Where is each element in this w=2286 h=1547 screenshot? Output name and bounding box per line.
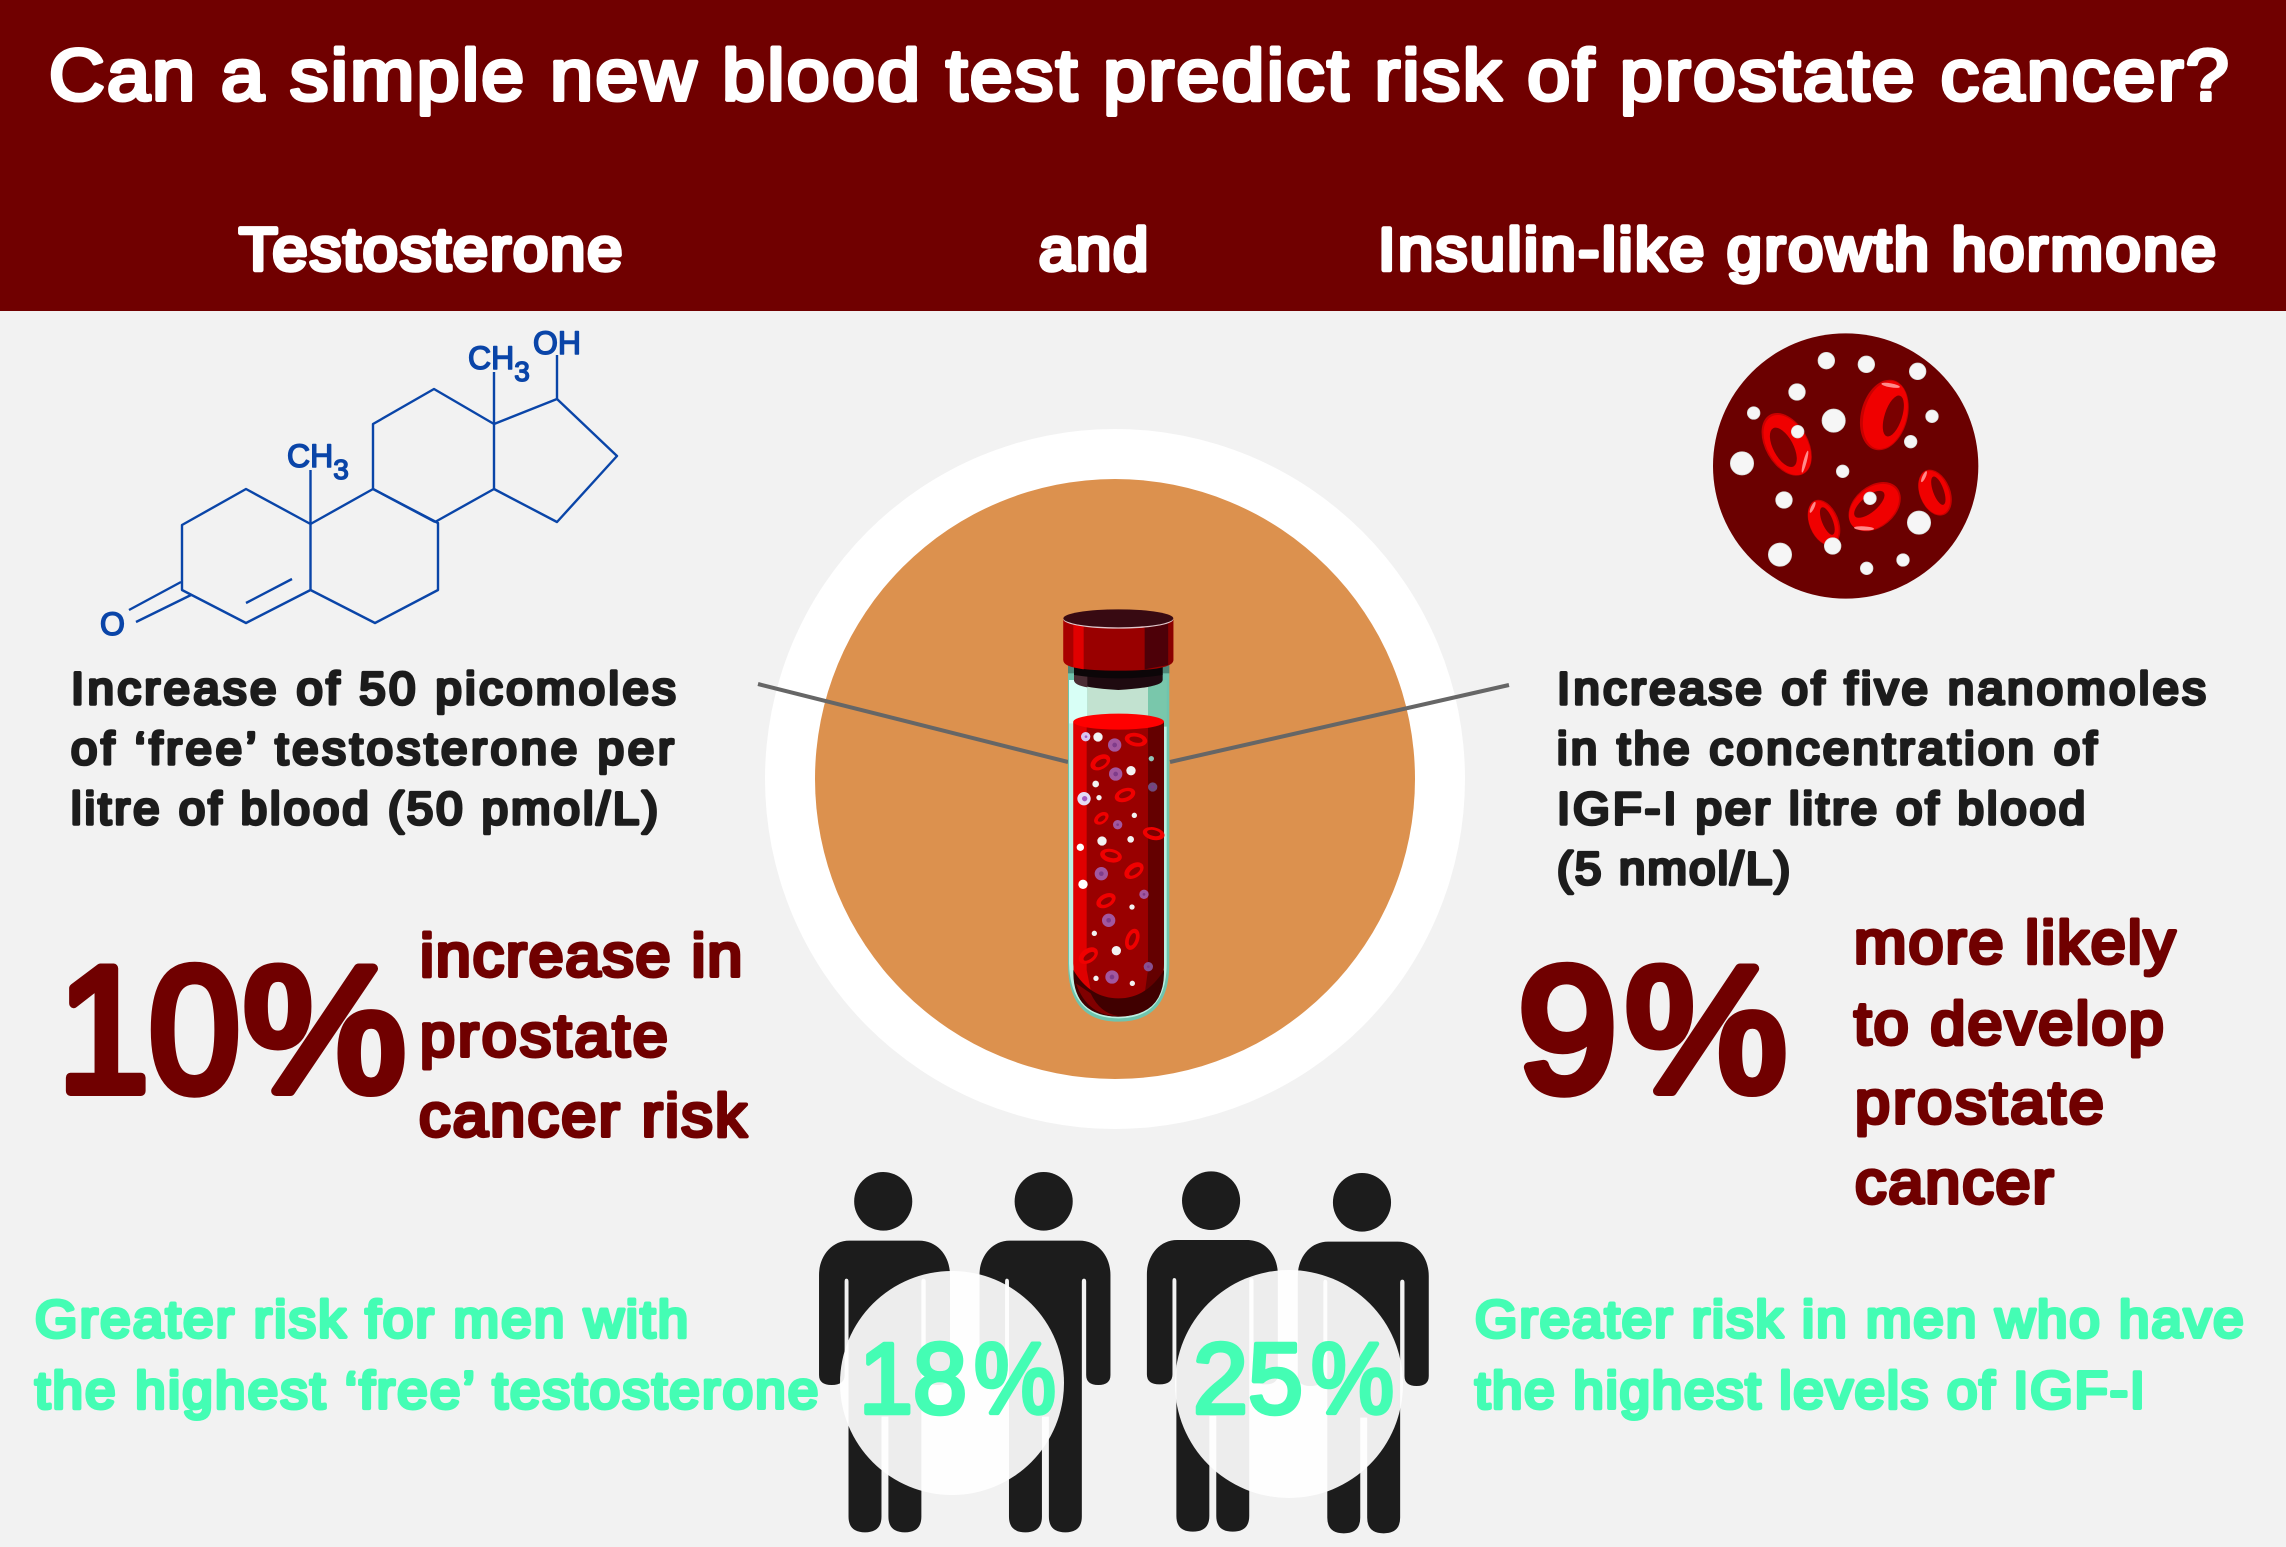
person 3: [1147, 1171, 1278, 1532]
stat: 9%: %: [1625, 930, 1787, 1129]
stat: 25%: %: [1311, 1323, 1394, 1435]
purple cells: [1077, 732, 1157, 984]
text block: IGF-I increase: in the concentration of: [1557, 723, 2097, 774]
stat text: more likely to develop prostate cancer: to develop: [1854, 990, 2164, 1058]
text block: IGF-I increase: (5 nmol/L): [1557, 843, 1790, 894]
text block: IGF-I increase: [1557, 663, 2206, 894]
heading: and: and: [1039, 216, 1148, 284]
label: CH3 upper: 3: [514, 356, 530, 387]
stat text: more likely to develop prostate cancer: prostate: [1855, 1069, 2104, 1137]
label: CH3 upper: CH: [468, 340, 514, 376]
stat text: increase in prostate cancer risk: increase in: [420, 922, 742, 990]
header banner: [0, 0, 2286, 311]
connector line: right: [1170, 685, 1509, 762]
text block: IGF-I increase: Increase of five nanomoles: [1557, 663, 2206, 714]
stat text: increase in prostate cancer risk: cancer risk: [419, 1082, 747, 1150]
text block: IGF-I increase: IGF-I per litre of blood: [1557, 783, 2085, 834]
text block: testosterone increase: of ‘free’ testosterone per: [71, 723, 674, 774]
stat: 25%: 25: [1193, 1323, 1303, 1435]
label: CH3 lower: 3: [333, 454, 349, 485]
stat: 9%: [1518, 930, 1787, 1129]
red cells: [1751, 374, 1958, 550]
callout: greater risk, testosterone: Greater risk for men with: [35, 1291, 688, 1349]
stat: 18%: %: [974, 1323, 1056, 1435]
person 2: [979, 1172, 1110, 1532]
stat text: increase in prostate cancer risk: [419, 922, 747, 1150]
stat: 10%: %: [243, 930, 406, 1129]
label: CH3 lower: CH: [287, 438, 333, 474]
person 1: [819, 1172, 950, 1532]
stopper: [1068, 665, 1169, 690]
highlight circle: 25%: [1175, 1270, 1403, 1498]
stat: 10%: [58, 930, 406, 1129]
connector line: left: [758, 684, 1068, 762]
white blood cells: [1077, 732, 1154, 986]
molecule: testosterone: [100, 325, 617, 642]
heading: testosterone: Testosterone: [239, 216, 622, 284]
text block: testosterone increase: [71, 663, 676, 834]
red blood cells: [1076, 731, 1166, 968]
text block: testosterone increase: litre of blood (50 pmol/L): [71, 783, 658, 834]
label: OH: OH: [533, 325, 581, 361]
title: Can a simple new blood test predict risk of prostate cancer?: [49, 35, 2229, 115]
people icons: [819, 1171, 1429, 1533]
stat text: more likely to develop prostate cancer: more likely: [1854, 909, 2176, 977]
cap: [1063, 609, 1173, 671]
stat: 25%: [1193, 1323, 1394, 1435]
stat: 9%: 9: [1518, 930, 1617, 1129]
stat: 10%: 10: [58, 930, 240, 1129]
icon: blood cells circle: [1713, 333, 1978, 599]
stat text: more likely to develop prostate cancer: [1854, 909, 2176, 1217]
white cells: [1730, 352, 1938, 575]
heading: insulin-like growth hormone: Insulin-like growth hormone: [1378, 216, 2216, 284]
callout: greater risk, testosterone: [35, 1291, 818, 1420]
label: O: O: [100, 606, 125, 642]
highlight circle: 18%: [840, 1271, 1064, 1495]
stat: 18%: [859, 1323, 1056, 1435]
callout: greater risk, IGF-I: Greater risk in men who have: [1475, 1291, 2244, 1349]
stat: 18%: 18: [859, 1323, 967, 1435]
text block: testosterone increase: Increase of 50 picomoles: [71, 663, 676, 714]
stat text: more likely to develop prostate cancer: cancer: [1855, 1149, 2053, 1217]
person 4: [1298, 1173, 1429, 1533]
icon: blood test tube: [1063, 609, 1173, 1022]
central circle: [765, 429, 1465, 1129]
stat text: increase in prostate cancer risk: prostate: [420, 1002, 668, 1070]
callout: greater risk, testosterone: the highest ‘free’ testosterone: [35, 1362, 818, 1420]
callout: greater risk, IGF-I: the highest levels of IGF-I: [1475, 1362, 2145, 1420]
callout: greater risk, IGF-I: [1475, 1291, 2244, 1420]
